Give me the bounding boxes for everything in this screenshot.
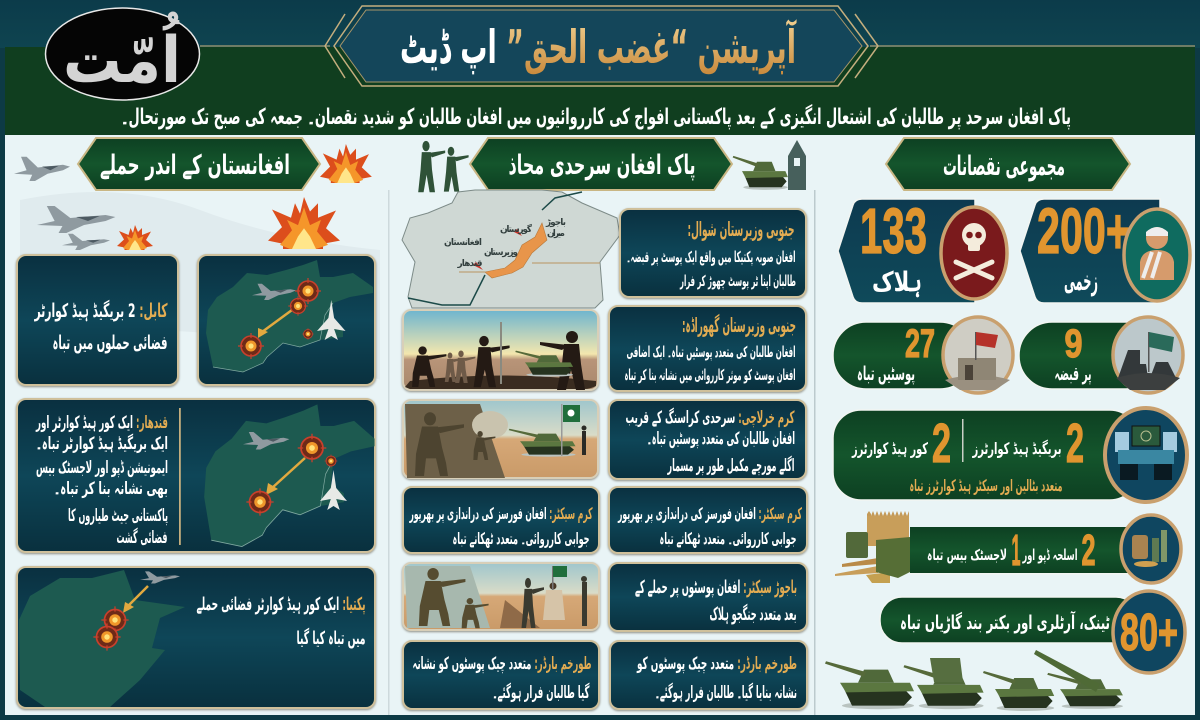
stat: 200+ wounded — [1020, 195, 1190, 303]
image: soldier, tank and flag — [403, 400, 598, 478]
card: Kurram Kharlachi: افغان طالبان کی متعدد پوسٹیں تباہ۔ — [647, 429, 795, 449]
card: Kurram Kharlachi: اگلے مورچے مکمل طور پر مسمار — [667, 455, 794, 476]
stat: 200+ wounded: 200+ — [1037, 195, 1130, 267]
card: Paktia — [17, 567, 375, 708]
text: افغان پوسٹ کو موثر کارروائی میں نشانہ بنا کر تباہ — [624, 366, 796, 385]
card: Paktia: پکتیا: ایک کور ہیڈ کوارٹر فضائی حملے — [196, 594, 366, 615]
card: Torkham border right: طورخم بارڈر: متعدد چیک پوسٹوں کو — [636, 654, 797, 674]
stat: ammo depots — [910, 515, 1181, 583]
card: Paktia: میں تباہ کیا گیا — [296, 627, 366, 649]
card: South Waziristan Ghora Adda — [609, 306, 806, 391]
card: Kabul text: فضائی حملوں میں تباہ — [52, 332, 168, 354]
stat: 80+ vehicles destroyed — [880, 591, 1185, 673]
icon: flag — [563, 405, 580, 422]
card: Kandahar: بھی نشانہ بنا کر تباہ۔ — [54, 479, 168, 499]
image: soldiers and captured post — [403, 563, 599, 630]
icon: small explosion — [117, 225, 153, 250]
stat: ammo depots: 1 — [1012, 526, 1020, 575]
icon: destroyed post — [945, 332, 1010, 390]
card: Bajaur sector — [609, 563, 807, 631]
card: Kandahar: ایمونیشن ڈپو اور لاجسٹک بیس — [36, 458, 168, 478]
stat: 27 posts destroyed — [833, 317, 1013, 393]
stat: ammo depots: لاجسٹک بیس تباہ — [927, 546, 1007, 564]
card: Kurram sector right — [609, 487, 807, 553]
card: Kurram sector right: جوابی کارروائی۔ متعدد ٹھکانے تباہ — [660, 529, 796, 548]
card: Kabul map — [198, 255, 375, 385]
heading: attacks inside Afghanistan — [78, 138, 320, 190]
icon: header tower — [788, 140, 806, 190]
heading: total losses — [886, 138, 1130, 190]
map: border area: میران — [547, 229, 565, 239]
heading: Pak-Afghan border front — [470, 138, 732, 190]
stat: headquarters destroyed — [833, 408, 1187, 502]
stat: ammo depots: اسلحہ ڈپو اور — [1022, 546, 1078, 565]
text: جنوبی وزیرستان شوال: — [688, 217, 794, 241]
card: Torkham border right — [610, 641, 807, 709]
text: افغان طالبان کی متعدد پوسٹیں تباہ۔ ایک اضافی — [626, 343, 796, 362]
text: طالبان اپنا ٹر پوسٹ چھوڑ کر فرار — [680, 272, 796, 291]
icon: two jets — [37, 206, 115, 250]
card: Torkham border left — [403, 641, 599, 709]
stat: 9 captured — [1019, 317, 1183, 393]
title text: آپریشن “غضب الحق” اپ ڈیٹ — [400, 19, 797, 75]
logo — [46, 8, 200, 100]
stat: 27 posts destroyed: پوسٹیں تباہ — [857, 363, 915, 385]
icon: green flag — [553, 566, 567, 577]
stat: ammo depots: 2 — [1082, 526, 1096, 575]
icon: header explosion — [320, 144, 372, 183]
heading: Pak-Afghan border front: پاک افغان سرحدی محاذ — [508, 150, 696, 181]
stat: 9 captured: 9 — [1064, 322, 1082, 366]
map: border area: گورستان — [500, 223, 533, 235]
text: افغان صوبہ پکتیکا میں واقع ایک پوسٹ پر قبضہ۔ — [626, 248, 796, 267]
card: Bajaur sector: باجوڑ سیکٹر: افغان پوسٹوں پر حملے کے — [635, 577, 797, 598]
stat: 27 posts destroyed: 27 — [905, 322, 935, 366]
card: Kandahar: پاکستانی جیٹ طیاروں کا — [68, 506, 168, 526]
image: soldiers in silhouette — [403, 310, 598, 390]
card: Kandahar — [17, 399, 375, 552]
card: Kurram sector left: جوابی کارروائی۔ متعدد ٹھکانے تباہ — [452, 529, 590, 548]
icon: ammunition pile — [835, 511, 910, 583]
stat: 200+ wounded: زخمی — [1064, 266, 1098, 297]
icon: header jet — [14, 157, 70, 181]
card: Bajaur sector: بعد متعدد جنگجو ہلاک — [710, 603, 796, 625]
card: Kabul text: کابل: 2 بریگیڈ ہیڈ کوارٹر — [34, 299, 168, 322]
map: border area — [402, 190, 620, 308]
stat: headquarters destroyed: 2 — [1066, 412, 1084, 474]
map: border area: افغانستان — [444, 238, 482, 248]
stat: headquarters destroyed: بریگیڈ ہیڈ کوارٹرز — [972, 439, 1062, 458]
heading: attacks inside Afghanistan: افغانستان کے اندر حملے — [100, 150, 290, 181]
icon: wounded man — [1140, 227, 1174, 280]
icon: header soldiers — [418, 141, 469, 192]
icon: captured ruins with flag — [1116, 332, 1180, 390]
icon: header tank — [733, 156, 788, 190]
card: Torkham border right: نشانہ بنایا گیا۔ طالبان فرار ہوگئے۔ — [655, 682, 797, 703]
card: Kurram Kharlachi: کرم خرلاچی: سرحدی کراسنگ کے قریب — [626, 407, 795, 428]
stat: 9 captured: پر قبضہ — [1054, 363, 1092, 385]
card: Kandahar: ایک بریگیڈ ہیڈ کوارٹر تباہ۔ — [36, 433, 168, 454]
card: Kurram sector left: کرم سیکٹر: افغان فورسز کی دراندازی پر بھرپور — [409, 504, 593, 524]
logo: اُمّت — [63, 11, 181, 98]
stat: headquarters destroyed: کور ہیڈ کوارٹرز — [851, 439, 928, 458]
map: border area: قندھار — [456, 259, 483, 269]
icon: ammo round badge — [1132, 530, 1167, 567]
card: Kurram sector left — [403, 487, 599, 553]
icon: armoured vehicles row — [825, 650, 1123, 711]
card: Torkham border left: طورخم بارڈر: متعدد چیک پوسٹوں کو نشانہ — [412, 654, 592, 674]
stat: 133 killed: 133 — [860, 195, 927, 267]
stat: 133 killed: ہلاک — [872, 267, 922, 298]
card: Kandahar: فضائی گشت — [116, 527, 168, 548]
text: جنوبی وزیرستان گھوراڈہ: — [682, 313, 796, 337]
stat: 133 killed — [838, 195, 1007, 303]
title plaque — [325, 6, 878, 86]
card: Torkham border left: گیا طالبان فرار ہوگئے۔ — [492, 682, 590, 703]
heading: total losses: مجموعی نقصانات — [943, 151, 1065, 182]
card: Kurram sector right: کرم سیکٹر: افغان فورسز کی دراندازی پر بھرپور — [618, 504, 802, 524]
panel: left column — [17, 197, 375, 708]
map: border area: وزیرستان — [484, 248, 518, 258]
icon: command centre — [1115, 426, 1177, 480]
icon: large explosion — [268, 197, 340, 249]
card: Kandahar: قندھار: ایک کور ہیڈ کوارٹر اور — [35, 413, 168, 433]
card: Kurram Kharlachi — [609, 400, 806, 479]
card: South Waziristan Shawal — [620, 209, 806, 297]
icon: skull and crossbones — [956, 223, 992, 278]
map: border area: باجوڑ — [545, 218, 566, 228]
stat: headquarters destroyed: 2 — [932, 412, 951, 474]
card: Kabul text — [17, 255, 178, 385]
